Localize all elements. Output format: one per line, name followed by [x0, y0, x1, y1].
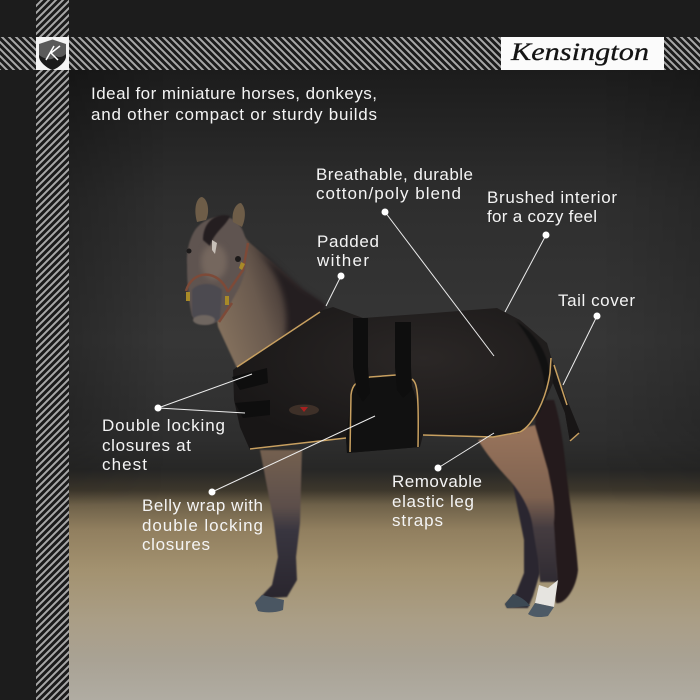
intro text: Ideal for miniature horses, donkeys, — [91, 84, 377, 103]
nose tip — [193, 315, 215, 325]
near foreleg — [255, 450, 302, 603]
callout: leg straps: straps — [392, 511, 443, 530]
callout: breathable blend: Breathable, durable — [316, 165, 473, 184]
callout: belly wrap: double locking — [142, 516, 263, 535]
callout: double locking closures: closures at — [102, 436, 191, 455]
chest straps — [232, 368, 268, 390]
far hind hoof — [505, 594, 530, 608]
near hind leg — [478, 425, 558, 582]
logo: Kensington wordmark — [501, 37, 664, 70]
callout: brushed interior: Brushed interior — [487, 188, 617, 207]
head — [187, 217, 248, 324]
forelock — [203, 215, 230, 246]
callout: leg straps: Removable — [392, 472, 482, 491]
white sock — [535, 580, 558, 607]
ears — [195, 197, 208, 222]
straps — [353, 318, 370, 402]
blanket rear shading — [516, 321, 550, 390]
photo background — [69, 128, 700, 700]
callout: tail cover: Tail cover — [558, 291, 635, 310]
intro text: and other compact or sturdy builds — [91, 105, 377, 124]
eyes — [186, 248, 192, 254]
callout: breathable blend — [316, 165, 494, 356]
belly wrap piping — [350, 375, 418, 452]
blaze — [212, 240, 217, 254]
tail — [535, 400, 578, 603]
striped left column — [36, 0, 69, 700]
icon: K shield logo — [36, 37, 69, 70]
callout: double locking closures: chest — [102, 455, 147, 474]
callout: padded wither — [316, 232, 379, 306]
callout: tail cover — [558, 291, 635, 385]
neck — [212, 232, 325, 368]
callout: leg straps: elastic leg — [392, 492, 474, 511]
striped header band — [0, 37, 700, 70]
belly wrap — [346, 375, 420, 453]
near hind hoof — [528, 603, 554, 617]
blanket badge — [289, 404, 319, 416]
callout: leg straps — [392, 433, 494, 530]
callout: breathable blend: cotton/poly blend — [316, 184, 461, 203]
callout: brushed interior — [487, 188, 617, 312]
mane — [250, 243, 328, 338]
far hind leg — [505, 470, 540, 608]
callout: padded wither: Padded — [317, 232, 379, 251]
callout: belly wrap: closures — [142, 535, 210, 554]
blanket body — [233, 307, 580, 453]
halter — [186, 243, 248, 322]
callout: padded wither: wither — [316, 251, 369, 270]
halter buckles — [186, 262, 245, 305]
blanket piping — [237, 312, 579, 449]
logo: Kensington wordmark: Kensington — [510, 39, 649, 66]
callout: belly wrap — [142, 416, 375, 554]
callout: double locking closures: Double locking — [102, 416, 225, 435]
near fore hoof — [255, 595, 284, 612]
muzzle — [192, 284, 222, 323]
horse illustration — [186, 197, 580, 617]
callout: double locking closures — [102, 374, 252, 474]
tail flap — [552, 360, 580, 442]
face highlight — [201, 244, 227, 280]
callout: belly wrap: Belly wrap with — [142, 496, 263, 515]
callout: brushed interior: for a cozy feel — [487, 207, 597, 226]
